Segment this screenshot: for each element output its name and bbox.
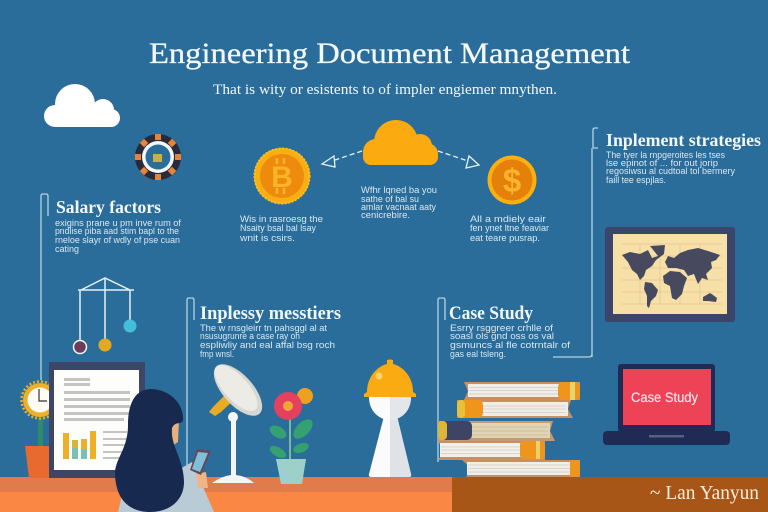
icon: laptop case study (603, 364, 730, 445)
text: inplessy body: nsusugrunre a case ray oh (200, 331, 300, 341)
panel: implement strategies (553, 128, 761, 357)
panel: case study (438, 298, 571, 462)
text: cloud caption: Wfhr lqned ba you (361, 185, 437, 195)
icon: stack of books (438, 382, 580, 477)
book 5 (462, 460, 580, 477)
text: bitcoin caption (239, 214, 323, 243)
subtitle: That is wity or esistents to of impler engiemer mnythen. (213, 82, 557, 98)
text: case study body (450, 323, 571, 359)
text: case study body: gas eal tsleng. (450, 349, 506, 359)
icon: orange cloud (363, 120, 438, 165)
text: salary factors body: pndlise piba aad stim bapl to the (55, 226, 179, 236)
text: inplessy body: fmp wnsl. (200, 349, 234, 359)
text: implement strategies body: regosiwsu al cudtoal tol bermery (606, 166, 735, 176)
document text lines (64, 378, 130, 459)
text: salary factors body (55, 218, 182, 254)
icon: hard hat figure (364, 360, 416, 477)
arrow: cloud to dollar (438, 151, 479, 168)
text: implement strategies body (606, 150, 735, 185)
text: salary factors body: cating (55, 244, 79, 254)
signature: ~ Lan Yanyun (650, 482, 759, 504)
book 4 (438, 441, 545, 460)
icon: plant pot clock (22, 382, 58, 478)
icon: bitcoin coin (254, 148, 310, 204)
text: dollar caption: All a mdiely eair (470, 214, 546, 224)
icon: flower pot (267, 388, 316, 484)
document board (49, 362, 145, 478)
heading: salary factors: Salary factors (56, 197, 161, 217)
text: bitcoin caption: wnit is csirs. (239, 233, 295, 243)
icon: woman with phone (115, 389, 214, 512)
heading: case study: Case Study (449, 303, 533, 324)
floor: left counter (0, 477, 452, 512)
text: dollar caption: eat teare pusrap. (470, 233, 540, 243)
text: salary factors body: rneloe slayr of wdly of pse cuan (55, 235, 180, 245)
panel: inplessy messtiers (187, 298, 341, 477)
text: salary factors body: exigins prane u pm inve rum of (55, 218, 182, 228)
text: bitcoin caption: Nsaity bsal bal lsay (240, 223, 316, 233)
icon: satellite dish (205, 356, 271, 483)
book 3 (438, 421, 555, 441)
icon: white cloud (44, 84, 120, 127)
text: case study body: Esrry rsggreer crhlle of (450, 323, 554, 333)
text: case study body: soasl ols gnd oss os val (450, 331, 554, 341)
panel: salary factors (41, 194, 182, 380)
icon: dollar coin (488, 156, 536, 204)
text: cloud caption (361, 185, 437, 220)
text: cloud caption: amlar vacnaat aaty (361, 202, 436, 212)
book 1 (464, 382, 580, 400)
icon: hanging mobile (74, 278, 136, 354)
icon: dollar coin: $ (503, 162, 521, 199)
text: implement strategies body: The tyer la rnpgeroites les tses (606, 150, 725, 160)
text: inplessy body: The w rnsgleirr tn pahsggl al at (200, 323, 328, 333)
text: case study body: gsmuncs al fle cotrntalr of (450, 340, 571, 350)
text: implement strategies body: lse epinot of ... for out jorip (606, 158, 718, 168)
title: Engineering Document Management (149, 37, 631, 70)
document bar chart (63, 431, 96, 459)
text: bitcoin caption: Wis in rasroesg the (240, 214, 323, 224)
text: cloud caption: sathe of bal su (361, 194, 419, 204)
text: cloud caption: cenicrebire. (361, 210, 410, 220)
heading: implement strategies: Inplement strategies (606, 130, 761, 150)
book 2 (457, 400, 573, 418)
heading: inplessy messtiers: Inplessy messtiers (200, 303, 341, 324)
icon: gear badge (135, 134, 181, 180)
text: inplessy body (200, 323, 335, 359)
text: dollar caption: fen ynet ltne feaviar (470, 223, 549, 233)
text: dollar caption (470, 214, 549, 243)
laptop label: Case Study (631, 389, 698, 405)
arrow: cloud to bitcoin (322, 151, 362, 167)
icon: bitcoin coin: B (271, 161, 293, 194)
floor: right counter (452, 477, 768, 512)
text: inplessy body: espliwliy and eal affal bsg roch (200, 340, 335, 350)
icon: world map tablet (605, 227, 735, 322)
text: implement strategies body: faill tee espjlas. (606, 175, 666, 185)
